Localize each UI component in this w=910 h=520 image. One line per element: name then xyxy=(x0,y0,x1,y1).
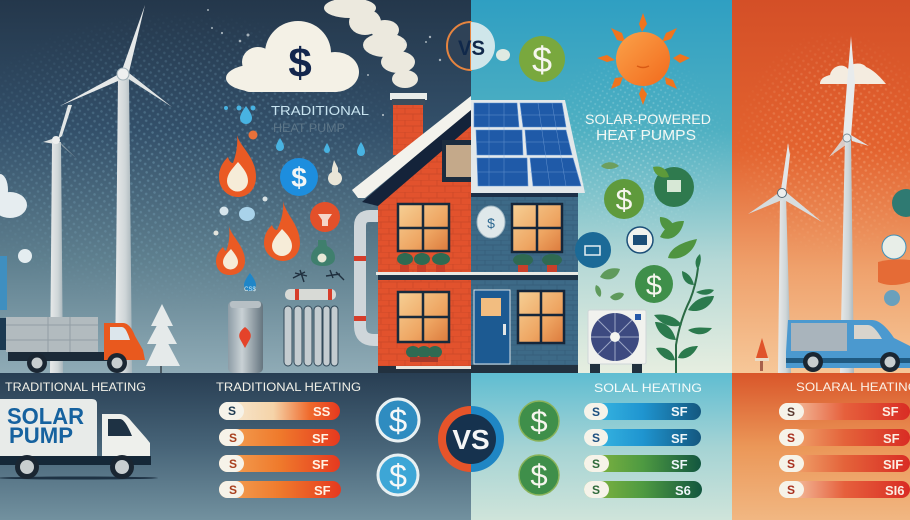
bar row 4: SI6 xyxy=(885,483,905,498)
icon: green coin with dollar xyxy=(604,179,644,219)
heading: traditional heat pump xyxy=(271,104,369,135)
icon: small tools xyxy=(293,270,344,282)
bar row 1 xyxy=(219,402,340,420)
bar row 3: S xyxy=(229,457,237,471)
bar row 4: S xyxy=(229,483,237,497)
icon: money bag xyxy=(311,240,335,266)
snow specks xyxy=(207,9,441,116)
icon: blue coin lower: $ xyxy=(389,458,407,494)
bar row 3: SF xyxy=(671,457,688,472)
icon: front wind turbine xyxy=(60,5,172,373)
icon: dark green badge xyxy=(653,166,694,207)
wall badge: $ xyxy=(487,215,495,231)
lower left window xyxy=(398,292,449,342)
bar row 3: S xyxy=(592,457,600,471)
bar row 4: S xyxy=(592,483,600,497)
chart: solaral heating bars xyxy=(779,380,910,498)
icon: green coin lower: $ xyxy=(646,270,662,302)
planters xyxy=(513,254,562,272)
icon: small blue tag xyxy=(244,273,256,293)
icon: blue dollar coin: $ xyxy=(291,162,307,193)
icon: green dollar coin: $ xyxy=(532,39,552,80)
icon: blue coin lower xyxy=(378,455,418,495)
icon: snowy pine tree xyxy=(146,304,180,373)
bar row 4 xyxy=(779,481,910,498)
text: cloud dollar: $ xyxy=(288,39,312,86)
planter boxes xyxy=(397,253,450,272)
bar row 4: S6 xyxy=(675,483,691,498)
heading: traditional heating left: TRADITIONAL HEATING xyxy=(5,380,146,394)
bar row 3: SF xyxy=(312,457,329,472)
icon: water drops xyxy=(224,106,365,156)
heading: solar-powered heat pumps xyxy=(585,111,711,144)
bar row 1: S xyxy=(787,405,795,419)
bar row 3: SIF xyxy=(883,457,903,472)
icon: rear wind turbine xyxy=(43,105,76,373)
icon: green leaves xyxy=(660,217,697,259)
bar row 2: S xyxy=(787,431,795,445)
chimney xyxy=(390,93,427,155)
text: solar pump xyxy=(7,403,84,448)
icon: green coin upper xyxy=(519,401,559,441)
icon: green coin lower bar: $ xyxy=(530,458,548,493)
text: solar pump: SOLAR xyxy=(7,403,84,429)
icon: pipe xyxy=(354,216,378,340)
heading: traditional heat pump: TRADITIONAL xyxy=(271,104,369,118)
icon: solar pump truck xyxy=(0,399,158,480)
bar row 3: S xyxy=(787,457,795,471)
wall badge xyxy=(477,206,505,238)
icon: small blue tag: CS$ xyxy=(244,287,256,293)
icon: blue coin xyxy=(575,232,611,268)
bar row 3 xyxy=(219,455,340,472)
bar row 3 xyxy=(779,455,910,472)
icon: right cloud xyxy=(820,64,886,84)
bar row 1 xyxy=(779,403,910,420)
icon: small left cloud xyxy=(0,174,27,218)
icon: flame one xyxy=(219,135,256,197)
badge: VS top xyxy=(447,22,510,70)
icon: plant xyxy=(654,254,714,373)
panel: orange background xyxy=(732,0,910,373)
icon: green dollar coin xyxy=(519,36,565,82)
bar row 2: SF xyxy=(312,431,329,446)
icon: green coin lower bar xyxy=(519,455,559,495)
house: traditional brick half xyxy=(352,93,471,373)
bar row 4: S xyxy=(787,483,795,497)
bar row 1 xyxy=(584,403,701,420)
roof xyxy=(352,96,471,206)
bar row 4 xyxy=(219,481,341,498)
icon: grey truck xyxy=(0,317,145,373)
lower planter xyxy=(406,346,442,362)
icon: sun xyxy=(597,13,690,105)
bar row 2 xyxy=(584,429,701,446)
door xyxy=(474,290,510,364)
icon: small leaf xyxy=(601,162,619,169)
panel: orange lower strip xyxy=(732,373,910,520)
icon: red coin xyxy=(310,202,340,232)
badge: VS bottom: VS xyxy=(452,424,490,455)
icon: blue coin upper: $ xyxy=(389,402,407,439)
icon: right edge badges xyxy=(878,189,910,306)
text: solar pump: PUMP xyxy=(9,423,73,448)
icon: light bubbles xyxy=(214,196,268,236)
icon: chimney smoke xyxy=(324,0,418,88)
heading: solar-powered heat pumps: HEAT PUMPS xyxy=(596,128,696,144)
house: solar half xyxy=(471,100,585,373)
icon: blue coin upper xyxy=(377,399,419,441)
solar panels xyxy=(471,100,585,197)
icon: left edge bottle and bubble xyxy=(0,249,32,310)
panel: solar background xyxy=(471,0,732,373)
icon: radiator xyxy=(284,289,338,366)
lower right window xyxy=(518,291,564,343)
icon: green coin upper: $ xyxy=(530,404,548,439)
bar row 1: SF xyxy=(882,404,899,419)
bar row 3 xyxy=(584,455,701,472)
icon: boiler tank xyxy=(228,301,263,373)
heading: traditional heating: TRADITIONAL HEATING xyxy=(216,380,361,394)
upper left window xyxy=(398,204,449,251)
bar row 2: SF xyxy=(883,431,900,446)
bar row 1: SS xyxy=(313,404,331,419)
bar row 1: S xyxy=(592,405,600,419)
heading: solal heating: SOLAL HEATING xyxy=(594,381,702,395)
chart: traditional heating bars xyxy=(216,380,361,498)
icon: blue dollar coin xyxy=(280,158,318,196)
bar row 2: S xyxy=(592,431,600,445)
badge: VS bottom xyxy=(438,406,504,472)
icon: air source heat pump xyxy=(588,310,646,373)
icon: white badge xyxy=(627,227,653,253)
icon: small orange dot xyxy=(248,130,258,140)
icon: flame two xyxy=(264,201,300,261)
heading: solar-powered heat pumps: SOLAR-POWERED xyxy=(585,111,711,127)
icon: small key badge xyxy=(328,160,342,185)
icon: loose leaves xyxy=(595,268,624,300)
bar row 4: SF xyxy=(314,483,331,498)
bar row 1: S xyxy=(228,404,236,418)
bar row 2: SF xyxy=(671,431,688,446)
icon: small red cone xyxy=(755,338,769,371)
icon: right small wind turbine xyxy=(748,143,822,373)
icon: green coin lower xyxy=(635,265,673,303)
bar row 1: SF xyxy=(671,404,688,419)
bar row 4 xyxy=(584,481,702,498)
panel: traditional lower strip xyxy=(0,373,471,520)
bar row 2 xyxy=(779,429,910,446)
icon: green coin with dollar: $ xyxy=(616,184,633,217)
ledge between floors xyxy=(376,272,578,280)
heading: traditional heat pump: HEAT PUMP xyxy=(273,121,345,135)
chart: solar heating bars xyxy=(584,381,702,498)
icon: right tall wind turbine xyxy=(829,36,869,373)
badge: VS top: VS xyxy=(458,37,485,60)
panel: traditional background xyxy=(0,0,471,373)
upper right window xyxy=(512,204,562,252)
bar row 2 xyxy=(219,429,340,446)
icon: blue truck xyxy=(786,320,910,372)
icon: flame three xyxy=(216,226,245,275)
heading: solaral heating: SOLARAL HEATING xyxy=(796,380,910,394)
attic window xyxy=(442,140,471,182)
panel: solar lower strip xyxy=(471,373,732,520)
icon: dollar cloud xyxy=(226,21,359,92)
bar row 2: S xyxy=(229,431,237,445)
